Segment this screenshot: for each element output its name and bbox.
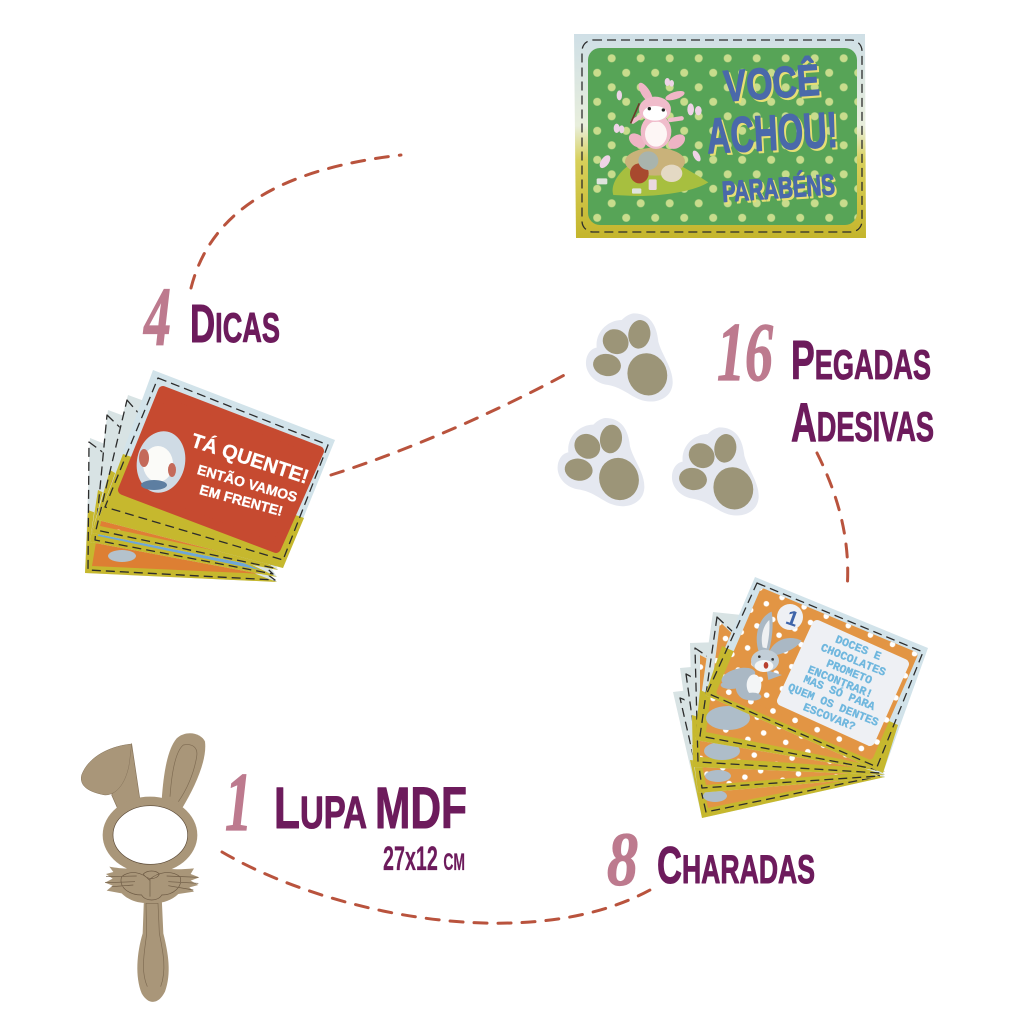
card text (188, 429, 312, 519)
text: Lupa dimensions: 27x12 CM (383, 840, 465, 878)
riddle text: CHOCOLATES (819, 642, 887, 680)
card back 4 (680, 660, 885, 793)
label: 16 Pegadas Adesivas: PEGADAS (791, 329, 931, 391)
illustration: bunny on painted eggs (597, 78, 708, 196)
riddle text: QUEM OS DENTES (786, 682, 880, 730)
label: 16 Pegadas Adesivas: ADESIVAS (791, 391, 934, 453)
card text: ENTÃO VAMOS (196, 460, 299, 505)
icon: MDF bunny magnifier (81, 733, 205, 1002)
label: 16 Pegadas Adesivas (717, 306, 934, 453)
heading: Você achou: ACHOU! (705, 102, 839, 164)
heading: Você achou (705, 55, 839, 209)
green card face (588, 48, 857, 225)
card back 4 (85, 438, 277, 582)
label: 8 Charadas: 8 (607, 818, 638, 902)
label: 1 Lupa MDF (225, 756, 467, 849)
icon: hatching egg chick (131, 427, 191, 497)
riddle text: DOCES E (833, 634, 883, 664)
number badge: 1 (783, 606, 802, 632)
label: 16 Pegadas Adesivas: 16 (717, 306, 773, 399)
card front: charada 1 (705, 577, 928, 773)
footprint bottom left (558, 418, 645, 506)
label: 4 Dicas: DICAS (190, 294, 280, 354)
illustration: grey rabbit (720, 612, 802, 701)
card back 5 (673, 680, 885, 818)
arrow: dashed path to Você Achou card (191, 155, 401, 288)
arrow: dashed path from footprints to Charadas (817, 453, 848, 590)
heading: Você achou: VOCÊ (722, 55, 821, 111)
label: 4 Dicas: 4 (143, 271, 171, 364)
footprint top (586, 313, 674, 402)
arrow: dashed path from Lupa to Charadas (222, 852, 650, 923)
card front: Tá quente (98, 370, 335, 568)
riddle text: PROMETO (824, 658, 874, 688)
footprint bottom right (672, 427, 760, 516)
card text: EM FRENTE! (198, 481, 285, 519)
card text: TÁ QUENTE! (188, 429, 312, 489)
label: 8 Charadas: CHARADAS (657, 837, 815, 895)
heading: Você achou: PARABÉNS (721, 167, 836, 209)
panel: Você achou card (574, 34, 866, 238)
rabbit peeking on back card (706, 706, 750, 730)
card back 2 (92, 395, 278, 570)
label: 8 Charadas (607, 818, 815, 902)
panel: Dicas cards stack (85, 370, 335, 582)
number badge (777, 604, 803, 632)
label: 4 Dicas (143, 271, 280, 364)
card back 3 (90, 410, 277, 577)
arrow: dashed path from Dicas to footprints (331, 372, 570, 475)
riddle text: ESCOVAR? (801, 701, 857, 734)
card back 3 (690, 640, 885, 775)
panel: Charadas cards stack (673, 577, 928, 818)
riddle text: ENCONTRAR! (806, 664, 874, 702)
question box (782, 625, 904, 741)
riddle text: MAS SÓ PARA (801, 673, 877, 714)
card back 2 (695, 612, 885, 772)
label: 1 Lupa MDF: LUPA MDF (274, 776, 467, 841)
riddle text (786, 634, 887, 734)
icons: three rabbit footprint stickers (558, 313, 760, 516)
label: 1 Lupa MDF: 1 (225, 756, 252, 849)
